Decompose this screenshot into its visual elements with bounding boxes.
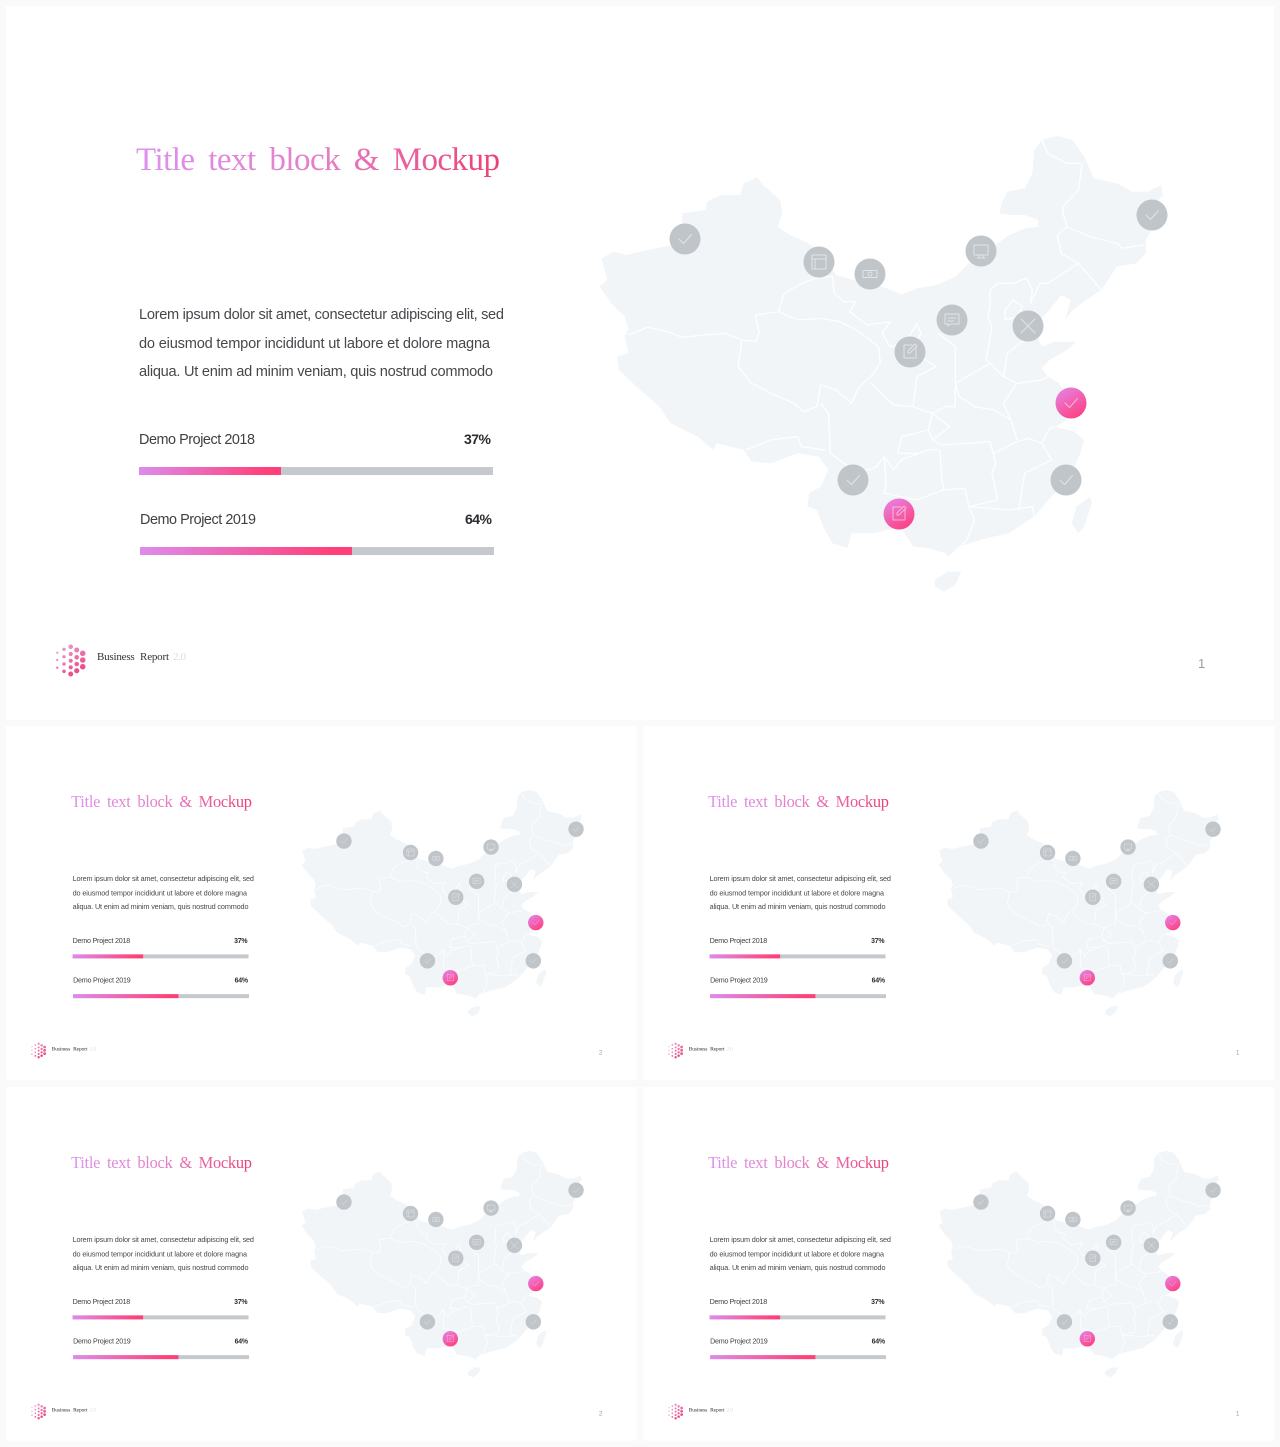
panel: main slide bbox=[6, 6, 1274, 720]
map with markers bbox=[939, 790, 1221, 1016]
progress: Demo Project 2018 bbox=[73, 1298, 249, 1319]
title: Title text block & Mockup bbox=[71, 792, 252, 811]
progress: Demo Project 2018: Demo Project 2018 bbox=[710, 1298, 767, 1306]
text block: description: aliqua. Ut enim ad minim veniam, quis nostrud commodo bbox=[710, 902, 886, 911]
progress: Demo Project 2019 bbox=[73, 977, 249, 998]
progress: Demo Project 2019: Demo Project 2019 bbox=[710, 1338, 768, 1346]
title: Title text block & Mockup bbox=[708, 1153, 889, 1172]
text block: description: Lorem ipsum dolor sit amet, consectetur adipiscing elit, sed bbox=[139, 307, 504, 323]
progress: Demo Project 2018: 37% bbox=[871, 1299, 885, 1306]
progress: Demo Project 2019: 64% bbox=[872, 978, 885, 985]
text block: description: do eiusmod tempor incididunt ut labore et dolore magna bbox=[710, 888, 885, 897]
text block: description bbox=[710, 874, 891, 911]
text block: description: aliqua. Ut enim ad minim veniam, quis nostrud commodo bbox=[73, 902, 249, 911]
text block: description: aliqua. Ut enim ad minim veniam, quis nostrud commodo bbox=[710, 1263, 886, 1272]
logo icon bbox=[56, 644, 85, 676]
footer brand: 2.0 bbox=[726, 1407, 733, 1413]
progress: Demo Project 2019: Demo Project 2019 bbox=[73, 1338, 131, 1346]
text block: description: Lorem ipsum dolor sit amet, consectetur adipiscing elit, sed bbox=[710, 1235, 891, 1244]
text block: description: do eiusmod tempor incididunt ut labore et dolore magna bbox=[139, 336, 491, 352]
text block: description bbox=[73, 1235, 254, 1272]
map with markers bbox=[600, 136, 1168, 592]
footer brand: 2.0 bbox=[89, 1046, 96, 1052]
progress: Demo Project 2018: 37% bbox=[234, 1299, 248, 1306]
page number: 2 bbox=[599, 1049, 603, 1056]
map with markers bbox=[302, 790, 584, 1016]
progress: Demo Project 2018: Demo Project 2018 bbox=[710, 937, 767, 945]
progress: Demo Project 2018 bbox=[73, 937, 249, 958]
text block: description: do eiusmod tempor incididunt ut labore et dolore magna bbox=[73, 1249, 248, 1258]
text block: description bbox=[710, 1235, 891, 1272]
page number: 1 bbox=[1198, 656, 1205, 671]
text block: description: Lorem ipsum dolor sit amet, consectetur adipiscing elit, sed bbox=[73, 874, 254, 883]
progress: Demo Project 2019 bbox=[140, 511, 494, 555]
panel: slide thumbnail bottom left bbox=[6, 1087, 637, 1441]
logo icon bbox=[31, 1404, 46, 1420]
progress: Demo Project 2019 bbox=[73, 1338, 249, 1359]
progress: Demo Project 2018: Demo Project 2018 bbox=[73, 937, 130, 945]
footer brand: Business Report bbox=[52, 1046, 88, 1052]
logo icon bbox=[31, 1043, 46, 1059]
panel: slide thumbnail bottom right bbox=[643, 1087, 1274, 1441]
footer brand: 2.0 bbox=[173, 651, 186, 663]
text block: description bbox=[139, 307, 504, 380]
footer brand: Business Report bbox=[97, 651, 169, 663]
progress: Demo Project 2018: 37% bbox=[464, 431, 492, 447]
progress: Demo Project 2019 bbox=[710, 977, 886, 998]
progress: Demo Project 2019: 64% bbox=[465, 511, 493, 527]
progress: Demo Project 2018: 37% bbox=[234, 938, 248, 945]
progress: Demo Project 2018 bbox=[710, 937, 886, 958]
text block: description: Lorem ipsum dolor sit amet, consectetur adipiscing elit, sed bbox=[73, 1235, 254, 1244]
page number: 2 bbox=[599, 1410, 603, 1417]
title: Title text block & Mockup bbox=[708, 792, 889, 811]
panel: slide thumbnail top left bbox=[6, 726, 637, 1080]
text block: description: aliqua. Ut enim ad minim veniam, quis nostrud commodo bbox=[73, 1263, 249, 1272]
title: Title text block & Mockup bbox=[136, 142, 500, 178]
progress: Demo Project 2018: Demo Project 2018 bbox=[139, 432, 255, 448]
footer brand: 2.0 bbox=[726, 1046, 733, 1052]
progress: Demo Project 2018 bbox=[710, 1298, 886, 1319]
progress: Demo Project 2018 bbox=[139, 431, 493, 475]
progress: Demo Project 2019 bbox=[710, 1338, 886, 1359]
page number: 1 bbox=[1236, 1049, 1240, 1056]
footer brand: Business Report bbox=[52, 1407, 88, 1413]
progress: Demo Project 2018: 37% bbox=[871, 938, 885, 945]
progress: Demo Project 2019: Demo Project 2019 bbox=[710, 977, 768, 985]
text block: description: Lorem ipsum dolor sit amet, consectetur adipiscing elit, sed bbox=[710, 874, 891, 883]
progress: Demo Project 2019: Demo Project 2019 bbox=[73, 977, 131, 985]
panel: slide thumbnail top right bbox=[643, 726, 1274, 1080]
logo icon bbox=[668, 1043, 683, 1059]
progress: Demo Project 2019: 64% bbox=[872, 1339, 885, 1346]
progress: Demo Project 2018: Demo Project 2018 bbox=[73, 1298, 130, 1306]
footer brand: Business Report bbox=[689, 1046, 725, 1052]
footer brand: 2.0 bbox=[89, 1407, 96, 1413]
text block: description: do eiusmod tempor incididunt ut labore et dolore magna bbox=[73, 888, 248, 897]
title: Title text block & Mockup bbox=[71, 1153, 252, 1172]
logo icon bbox=[668, 1404, 683, 1420]
text block: description: do eiusmod tempor incididunt ut labore et dolore magna bbox=[710, 1249, 885, 1258]
progress: Demo Project 2019: Demo Project 2019 bbox=[140, 512, 256, 528]
text block: description: aliqua. Ut enim ad minim veniam, quis nostrud commodo bbox=[139, 364, 493, 380]
footer brand: Business Report bbox=[689, 1407, 725, 1413]
text block: description bbox=[73, 874, 254, 911]
progress: Demo Project 2019: 64% bbox=[235, 978, 248, 985]
progress: Demo Project 2019: 64% bbox=[235, 1339, 248, 1346]
map with markers bbox=[302, 1151, 584, 1377]
map with markers bbox=[939, 1151, 1221, 1377]
page number: 1 bbox=[1236, 1410, 1240, 1417]
